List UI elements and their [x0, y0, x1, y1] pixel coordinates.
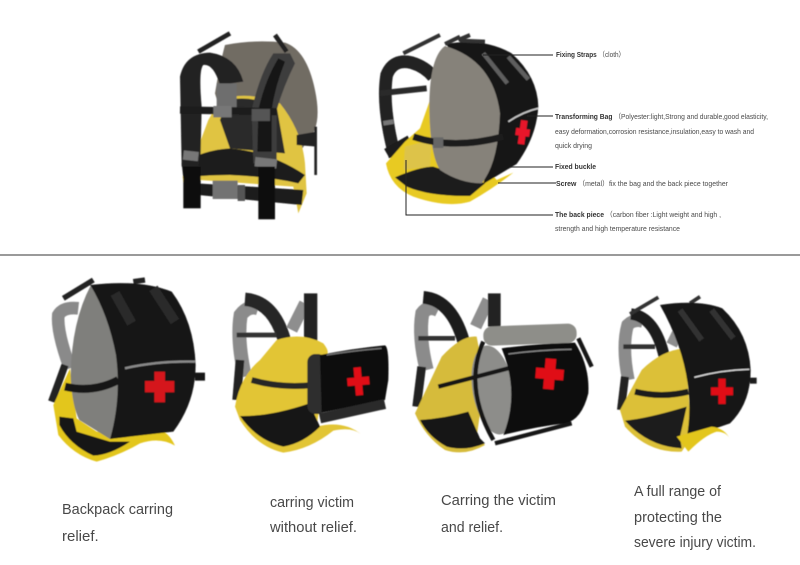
- black bag: [446, 42, 538, 184]
- icon: red cross: [346, 366, 370, 396]
- yellow helmet shell: [415, 337, 485, 452]
- backpack: rear view with harness: [180, 33, 318, 219]
- mesh back panel: [215, 41, 318, 157]
- backpack: full range protection: [620, 297, 757, 452]
- mesh panel: [71, 286, 118, 439]
- horizontal strap and buckle: [413, 137, 503, 143]
- lower straps: [320, 404, 385, 418]
- label: back piece: [555, 210, 721, 233]
- mesh end of bag: [465, 342, 521, 438]
- rolled mesh: [307, 354, 326, 414]
- leader lines: [406, 55, 556, 215]
- label: transforming bag: easy deformation,corrosion resistance,insulation,easy to wash and: [555, 127, 754, 136]
- wrap straps: [438, 338, 592, 443]
- black padding: [220, 98, 285, 153]
- caption: full range of protection: [634, 483, 756, 551]
- caption: full range of protection: A full range of: [634, 483, 722, 500]
- straps and buckles: [180, 33, 287, 164]
- caption: backpack carrying relief: [62, 501, 173, 545]
- label: back piece: The back piece （carbon fiber :Light weight and high ,: [555, 210, 721, 219]
- icon: red cross: [145, 372, 174, 402]
- label: screw: Screw （metal）fix the bag and the back piece together: [556, 179, 729, 188]
- caption: carrying victim and relief: and relief.: [441, 519, 503, 536]
- black bag wrap: [660, 303, 751, 438]
- icon: red cross: [534, 357, 565, 390]
- label: fixed buckle: Fixed buckle: [555, 162, 596, 171]
- left shoulder strap: [180, 53, 243, 167]
- caption: full range of protection: protecting the: [634, 509, 722, 526]
- backpack: carrying relief: [52, 280, 205, 462]
- yellow foot: [677, 427, 730, 452]
- mesh roll on top: [483, 323, 577, 346]
- right shoulder strap: [252, 53, 295, 163]
- label: transforming bag: Transforming Bag （Polyester:light,Strong and durable,good elasticity,: [555, 112, 768, 121]
- caption: carrying victim and relief: [441, 492, 556, 536]
- shoulder straps: [417, 293, 494, 407]
- backpack: side view with transforming bag: [380, 35, 538, 204]
- caption: backpack carrying relief: relief.: [62, 528, 99, 545]
- mesh panel: [429, 46, 500, 183]
- black bag: [90, 283, 196, 439]
- yellow helmet shell: [235, 337, 361, 453]
- black lower insert: [240, 403, 320, 447]
- yellow back piece: [183, 96, 307, 213]
- shoulder straps: [237, 293, 311, 400]
- label: fixing straps: Fixing Straps （cloth）: [556, 50, 625, 59]
- icon: red cross: [711, 379, 733, 404]
- harness: [380, 35, 470, 157]
- horizontal strap: [252, 380, 313, 386]
- label: transforming bag: quick drying: [555, 141, 592, 150]
- caption: backpack carrying relief: Backpack carring: [62, 501, 173, 518]
- zipper: [508, 108, 538, 122]
- label: transforming bag: [555, 112, 768, 150]
- label: back piece: strength and high temperature resistance: [555, 224, 680, 233]
- folded black bag: [320, 345, 389, 413]
- black bag cylinder: [502, 343, 588, 435]
- yellow helmet shell: [620, 348, 692, 452]
- icon: red cross: [514, 119, 531, 145]
- black lower insert: [625, 407, 687, 448]
- yellow back piece: [53, 368, 175, 462]
- straps and zipper: [680, 310, 733, 340]
- straps and zipper: [115, 288, 175, 323]
- backpack: carrying victim and relief: [415, 293, 592, 452]
- caption: carrying victim without relief: without relief.: [269, 519, 357, 536]
- part labels: [555, 50, 768, 233]
- caption: carrying victim and relief: Carring the victim: [441, 492, 556, 509]
- fixing straps: [483, 53, 528, 83]
- divider: [0, 254, 800, 256]
- waist belt and buckle: [183, 127, 317, 219]
- caption: carrying victim without relief: [269, 494, 357, 536]
- backpack: carrying victim without relief: [235, 293, 389, 453]
- black lower insert: [420, 412, 485, 449]
- harness: [52, 280, 145, 402]
- shoulder straps: [621, 297, 700, 410]
- yellow back piece: [386, 100, 513, 204]
- caption: full range of protection: severe injury victim.: [634, 534, 756, 551]
- caption: carrying victim without relief: carring victim: [270, 494, 354, 511]
